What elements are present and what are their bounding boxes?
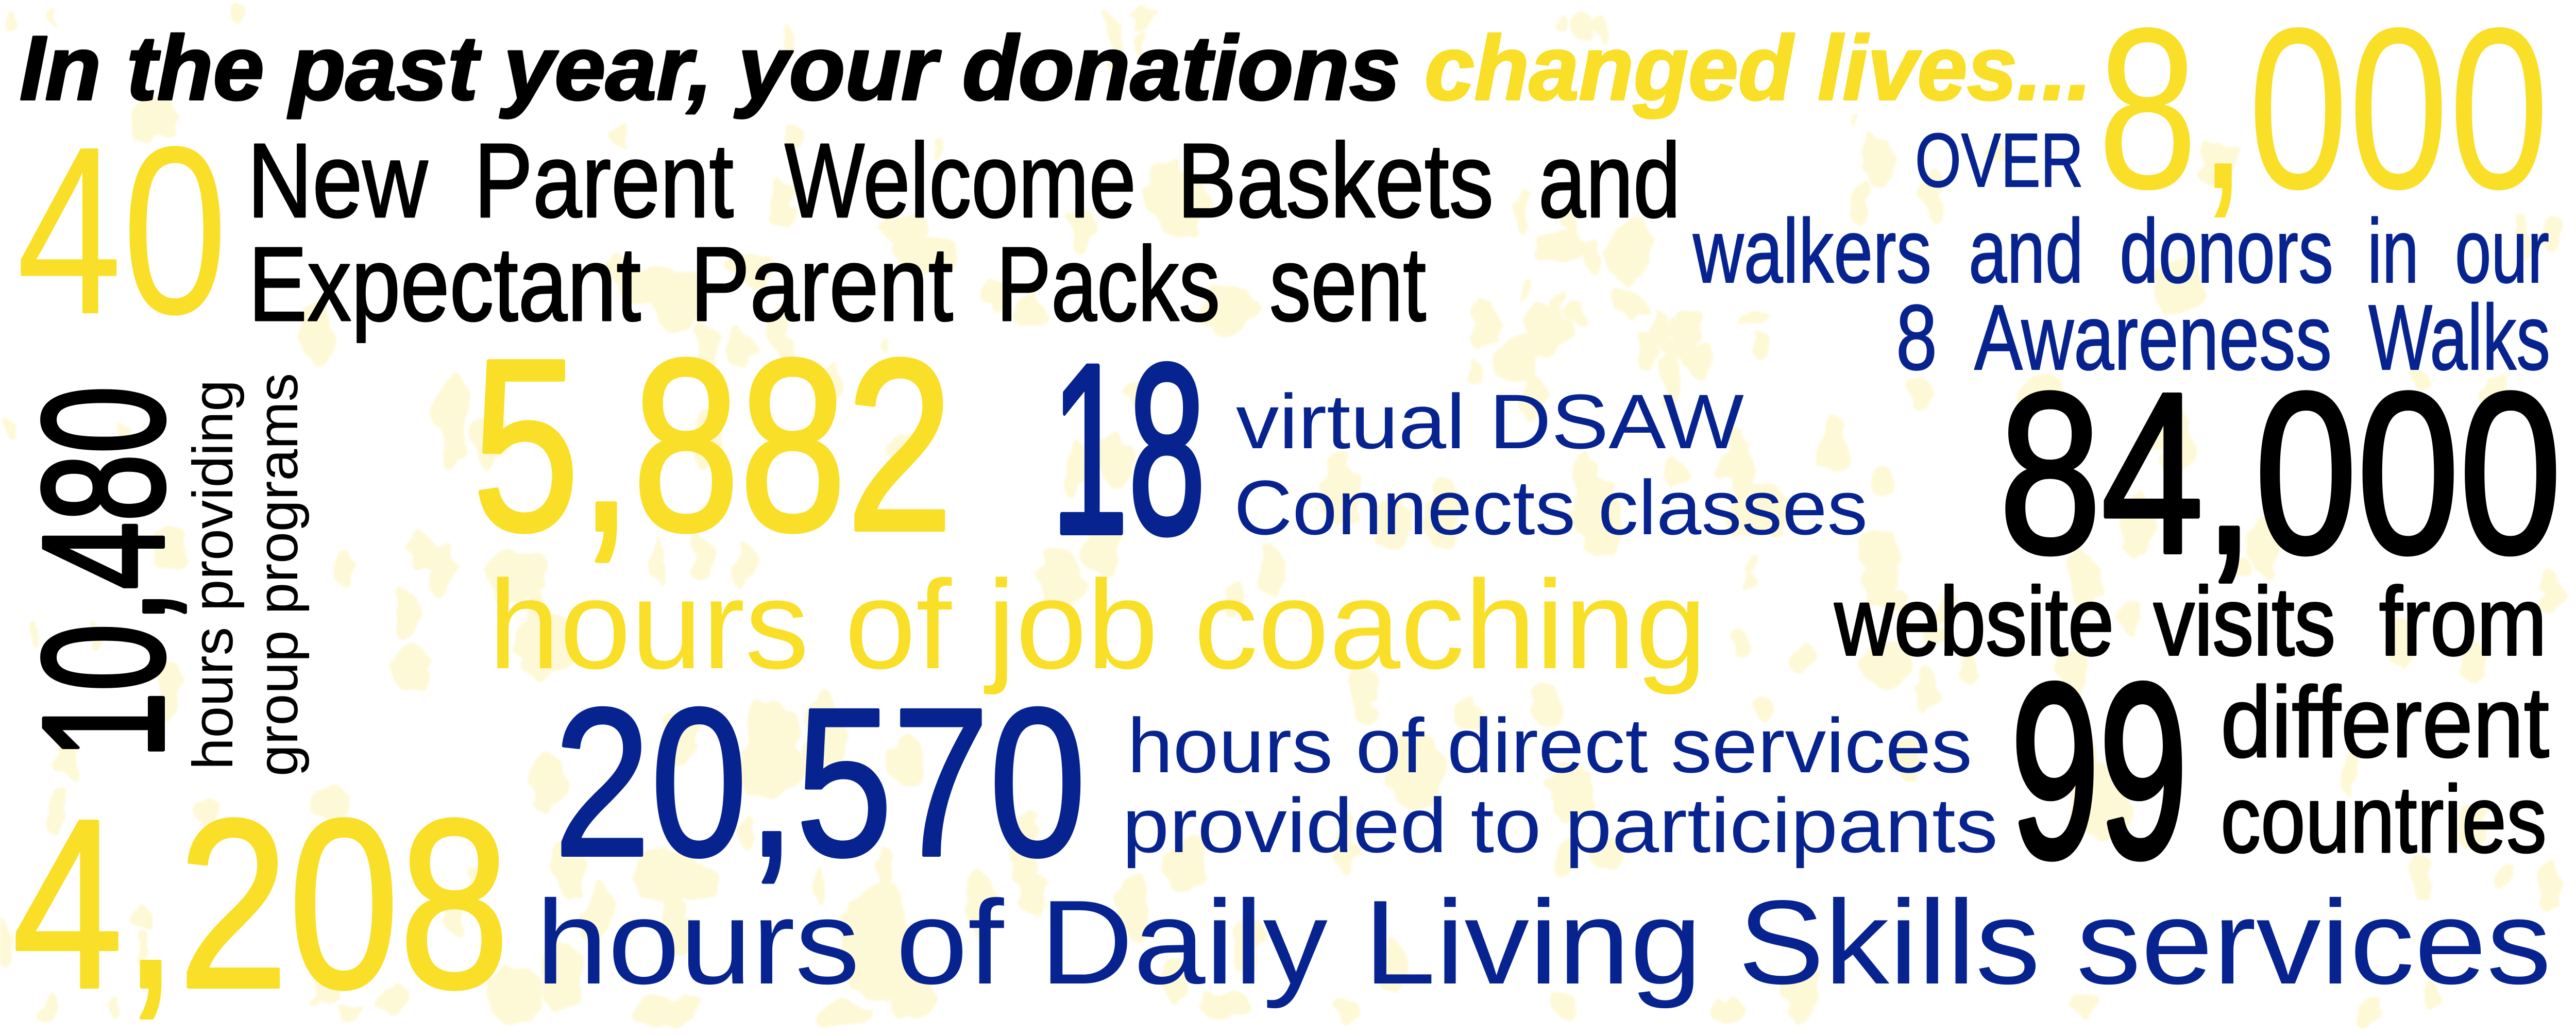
caption (1834, 567, 2547, 675)
caption line 2: Expectant (248, 225, 641, 343)
title (20, 17, 2092, 119)
caption line 1: donors (2120, 201, 2333, 302)
number: 10,480: 10,480 (7, 386, 199, 759)
caption line 1: in (2367, 201, 2419, 302)
title: black part: In the past year, your donations (20, 17, 1400, 119)
caption line 1: hours of direct services (1127, 702, 1972, 789)
caption line 2: sent (1269, 225, 1426, 343)
caption line 2 (1896, 286, 2550, 389)
caption line 1 (247, 122, 1681, 240)
caption line 1: Baskets (1177, 122, 1494, 240)
stat: over 8,000 walkers (1692, 0, 2550, 389)
caption: from (2379, 567, 2547, 675)
caption line 2: 8 (1896, 286, 1937, 389)
number: 20,570: 20,570 (554, 664, 1086, 900)
caption line 1: walkers (1692, 201, 1931, 302)
caption line 2: Connects classes (1234, 464, 1868, 551)
caption line 2 (248, 225, 1426, 343)
stat: 18 virtual classes (1051, 314, 1868, 584)
caption line 1 (1692, 201, 2549, 302)
stat: 84,000 website visits (1834, 345, 2562, 675)
caption line 2: group programs (246, 373, 310, 776)
number: 4,208: 4,208 (12, 769, 510, 1035)
caption line 2: Parent (690, 225, 953, 343)
stat: 20,570 hours of direct services (554, 664, 1998, 900)
caption line 1: virtual DSAW (1236, 378, 1744, 465)
caption: hours of job coaching (488, 554, 1707, 695)
number: 18: 18 (1051, 314, 1206, 584)
stat: 99 countries (2011, 632, 2549, 909)
stat: 4,208 hours of daily living skills (12, 769, 2551, 1035)
caption line 2: Packs (996, 225, 1220, 343)
number: 40: 40 (16, 96, 228, 364)
caption line 1: Parent (474, 122, 734, 240)
caption line 1: hours providing (181, 380, 245, 770)
caption line 1: and (1969, 201, 2083, 302)
stat: 10,480 hours, rotated (7, 373, 310, 776)
stat: 5,882 hours of job coaching (472, 308, 1707, 695)
caption line 2: provided to participants (1122, 782, 1998, 869)
caption: visits (2154, 567, 2335, 675)
caption line 1: different (2221, 666, 2549, 778)
caption line 1: Welcome (785, 122, 1136, 240)
caption line 2: Awareness (1974, 286, 2332, 389)
stat: 40 baskets (16, 96, 1681, 364)
caption: website (1834, 567, 2114, 675)
title: yellow part: changed lives... (1425, 17, 2092, 119)
caption: hours of Daily Living Skills services (536, 876, 2551, 1009)
number: 5,882: 5,882 (472, 308, 953, 582)
number: 99: 99 (2011, 632, 2188, 909)
caption line 1: New (247, 122, 428, 240)
label: OVER: OVER (1915, 118, 2083, 203)
caption line 1: and (1538, 122, 1681, 240)
